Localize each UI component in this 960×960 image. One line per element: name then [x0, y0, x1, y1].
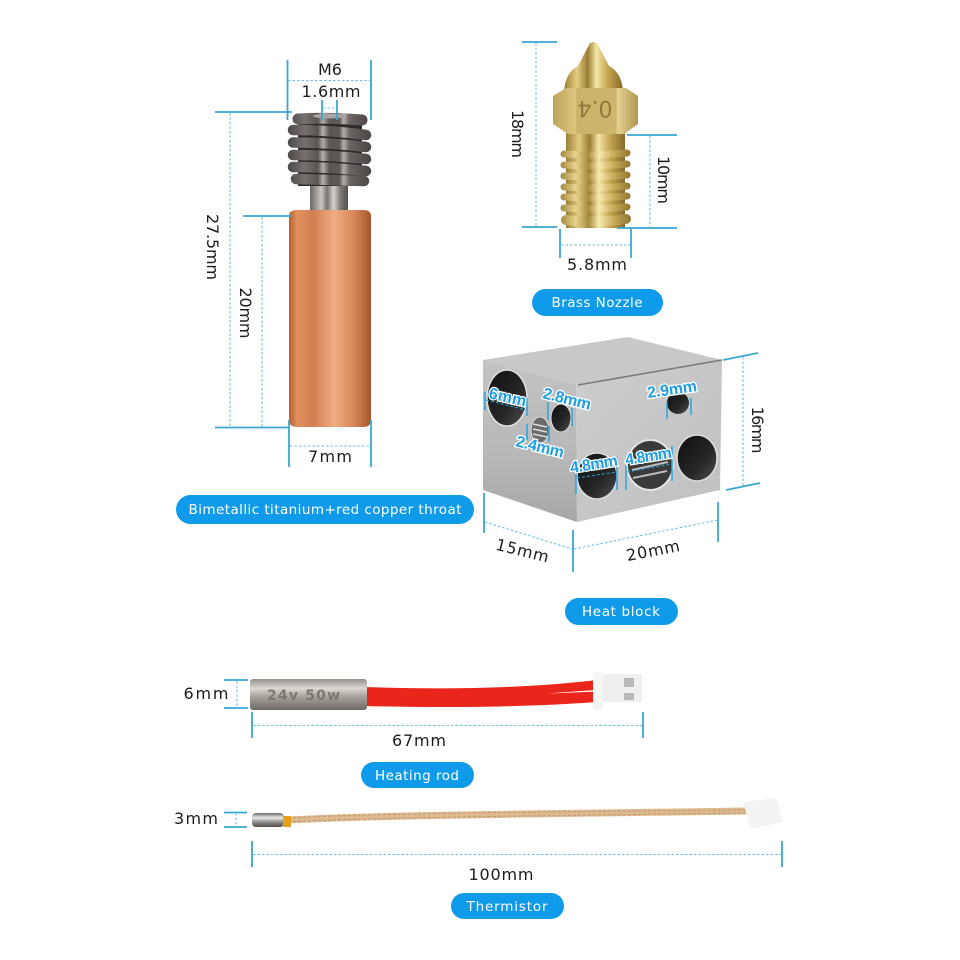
red wires	[364, 680, 597, 707]
bore label: 2.8mm: 2.8mm	[541, 385, 593, 414]
dimension: 6mm	[184, 680, 248, 708]
nozzle hex with 0.4 mark: 0.4	[578, 95, 612, 120]
block body	[483, 337, 722, 522]
dimension: 20mm: 20mm	[625, 536, 681, 565]
dimension: 15mm	[484, 493, 573, 572]
thermistor probe	[252, 813, 284, 827]
label: heating rod	[361, 762, 474, 788]
dimension: 1.600mm bore: 1.6mm	[302, 82, 360, 101]
dimension: 7mm: 7mm	[308, 447, 352, 466]
panel: brass nozzle	[508, 42, 677, 274]
dimension: 18mm	[508, 42, 557, 227]
dimension: 3mm	[174, 809, 247, 828]
nozzle hex with 0.4 mark	[553, 88, 638, 134]
label: heat block: Heat block	[582, 604, 660, 620]
nozzle thread	[564, 132, 627, 228]
label: thermistor: Thermistor	[466, 899, 548, 915]
dimension: M6: M6	[318, 60, 342, 79]
white connector	[593, 672, 642, 710]
dimension: 5.8mm: 5.8mm	[567, 255, 627, 274]
bore label: 2.9mm: 2.9mm	[646, 378, 698, 402]
panel: thermistor	[174, 798, 783, 884]
dimension: 16mm	[723, 353, 767, 490]
heater cartridge: 24v 50w	[267, 688, 340, 704]
dimension: 15mm: 15mm	[494, 535, 551, 566]
thermistor connector	[743, 798, 783, 829]
dimension: 1.600mm bore	[302, 82, 360, 120]
label: brass nozzle	[532, 289, 663, 316]
label: thermistor	[451, 893, 564, 919]
dimension: 100mm	[252, 841, 782, 884]
bore label: 2.4mm: 2.4mm	[514, 433, 566, 462]
label: heat block	[565, 598, 678, 625]
dimension: 27.5mm	[203, 112, 292, 428]
braided wire	[288, 810, 746, 822]
bore label: 4.8mm left: 4.8mm	[569, 453, 619, 477]
dimension: M6	[288, 60, 371, 120]
heater cartridge	[250, 679, 367, 710]
bore label: 2.8mm	[541, 385, 593, 426]
dimension: 6mm: 6mm	[184, 684, 228, 703]
bore label: 4.8mm middle: 4.8mm	[624, 445, 673, 469]
dimension: 7mm	[289, 420, 371, 467]
dimension: 20mm	[574, 502, 718, 565]
bore label: 2.9mm	[646, 378, 698, 419]
dimension: 67mm	[252, 712, 643, 750]
bore label: 4.8mm left	[569, 453, 619, 494]
bore label: 6mm: 6mm	[487, 385, 528, 410]
dimension: 20mm: 20mm	[236, 288, 255, 338]
dimension: 3mm: 3mm	[174, 809, 218, 828]
bore label: 4.8mm middle	[624, 445, 673, 490]
label: bimetallic throat: Bimetallic titanium+red copper throat	[188, 502, 462, 518]
panel: heat block	[483, 337, 767, 572]
label: brass nozzle: Brass Nozzle	[552, 295, 642, 311]
block holes	[487, 370, 717, 499]
titanium thread	[293, 114, 366, 186]
dimension: 18mm: 18mm	[508, 110, 527, 158]
label: bimetallic throat	[176, 495, 474, 524]
throat neck	[310, 184, 348, 214]
panel: bimetallic throat	[203, 60, 371, 467]
dimension: 27.5mm: 27.5mm	[203, 214, 222, 280]
yellow sleeve	[283, 816, 291, 827]
copper tube	[289, 210, 371, 427]
dimension: 10mm	[617, 135, 677, 228]
panel: heating rod	[184, 672, 643, 750]
label: heating rod: Heating rod	[375, 768, 459, 784]
nozzle tip	[564, 42, 623, 90]
dimension: 5.8mm	[560, 229, 631, 274]
dimension: 10mm: 10mm	[654, 156, 673, 204]
dimension: 16mm: 16mm	[748, 406, 767, 454]
dimension: 100mm: 100mm	[468, 865, 534, 884]
dimension: 67mm: 67mm	[392, 731, 446, 750]
